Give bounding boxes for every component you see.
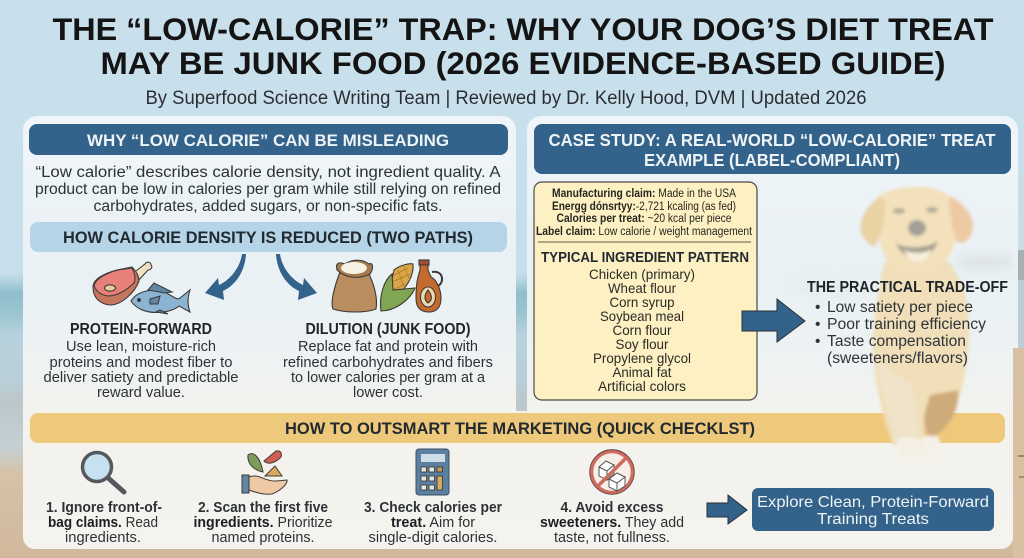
panel content: checklist	[46, 419, 994, 546]
text block: step 4	[540, 500, 684, 546]
text block: practical trade-off: •	[815, 333, 820, 350]
text block: step 4: taste, not fullness.	[554, 530, 670, 546]
text block: protein-forward: proteins and modest fiber to	[50, 355, 233, 371]
text block: practical trade-off: Low satiety per piece	[827, 299, 973, 316]
checklist heading bar	[30, 413, 1005, 443]
heading: how calorie density is reduced: HOW CALORIE DENSITY IS REDUCED (TWO PATHS)	[63, 228, 473, 247]
list: ingredients: Wheat flour	[608, 280, 676, 296]
icon: no sugar cubes	[590, 450, 634, 494]
text block: label claims	[536, 188, 753, 238]
text block: practical trade-off: Poor training efficiency	[827, 316, 986, 333]
heading: why low calorie can be misleading	[29, 124, 508, 155]
heading: why low calorie can be misleading: WHY “LOW CALORIE” CAN BE MISLEADING	[87, 131, 449, 150]
button: explore treats: Training Treats	[817, 511, 929, 528]
text block: protein-forward: PROTEIN-FORWARD	[70, 321, 212, 338]
text block: definition	[35, 164, 501, 215]
heading: case study: CASE STUDY: A REAL-WORLD “LOW-CALORIE” TREAT	[548, 130, 996, 150]
title	[52, 11, 994, 81]
text block: dilution: to lower calories per gram at a	[291, 370, 486, 386]
text block: dilution: DILUTION (JUNK FOOD)	[306, 321, 470, 338]
arrow: to dilution	[276, 254, 317, 300]
text block: practical trade-off: THE PRACTICAL TRADE-OFF	[807, 279, 1008, 296]
text block: step 3: treat. Aim for	[391, 515, 475, 531]
arrow: to protein-forward	[205, 254, 246, 300]
panel content: why low calorie	[29, 124, 508, 401]
text block: definition: “Low calorie” describes calorie density, not ingredient quality. A	[36, 164, 501, 181]
heading: case study	[534, 124, 1011, 174]
text block: dilution: lower cost.	[353, 385, 423, 401]
text block: label claims: Label claim: Low calorie / weight management	[536, 226, 753, 238]
arrow: to call to action	[707, 495, 747, 524]
button: explore treats: Explore Clean, Protein-Forward	[757, 494, 989, 511]
heading: typical ingredient pattern: TYPICAL INGREDIENT PATTERN	[541, 250, 749, 266]
list: ingredients: Corn flour	[612, 322, 672, 338]
text block: label claims: Manufacturing claim: Made in the USA	[552, 188, 736, 200]
icon: flour sack, corn and syrup	[332, 260, 442, 312]
text block: step 2: 2. Scan the first five	[198, 500, 328, 516]
text block: definition: product can be low in calories per gram while still relying on refined	[35, 181, 501, 198]
text block: protein-forward: deliver satiety and predictable	[44, 370, 238, 386]
list: ingredients: Soy flour	[616, 336, 669, 352]
panel content: case study	[534, 124, 1011, 400]
heading: how calorie density is reduced	[30, 222, 507, 252]
text block: practical trade-off: (sweeteners/flavors)	[827, 350, 968, 367]
panel background: case study	[527, 116, 1018, 413]
text block: practical trade-off: •	[815, 299, 820, 316]
text block: practical trade-off: Taste compensation	[827, 333, 966, 350]
text block: step 2: named proteins.	[212, 530, 314, 546]
text block: dilution	[283, 321, 493, 401]
heading: how to outsmart the marketing: HOW TO OUTSMART THE MARKETING (QUICK CHECKLST)	[285, 419, 755, 438]
text block: step 4: sweeteners. They add	[540, 515, 684, 531]
icon: magnifying glass	[82, 452, 124, 492]
text block: step 1: 1. Ignore front-of-	[46, 500, 162, 516]
heading: case study: EXAMPLE (LABEL-COMPLIANT)	[644, 150, 900, 170]
text block: step 1: ingredients.	[65, 530, 141, 546]
text block: label claims: Calories per treat: ~20 kcal per piece	[556, 213, 732, 225]
photo: golden retriever	[860, 187, 973, 463]
title: THE “LOW-CALORIE” TRAP: WHY YOUR DOG’S DIET TREAT	[52, 11, 994, 47]
text block: protein-forward: Use lean, moisture-rich	[66, 339, 216, 355]
text block: step 3: 3. Check calories per	[364, 500, 502, 516]
panel background: checklist	[23, 411, 1013, 549]
byline: By Superfood Science Writing Team | Reviewed by Dr. Kelly Hood, DVM | Updated 2026	[146, 88, 866, 109]
text block: step 3	[364, 500, 502, 546]
text block: step 1: bag claims. Read	[48, 515, 158, 531]
text block: step 3: single-digit calories.	[368, 530, 498, 546]
panel background: why low calorie	[23, 116, 516, 413]
list: ingredients: Chicken (primary)	[589, 266, 695, 282]
icon: meat and fish	[93, 262, 190, 314]
list: ingredients: Animal fat	[612, 364, 672, 380]
list: ingredients	[589, 266, 695, 394]
text block: practical trade-off: •	[815, 316, 820, 333]
text block: step 2: ingredients. Prioritize	[194, 515, 332, 531]
icon: calculator	[416, 449, 449, 495]
text block: label claims: Energg dónsrtyy:-2,721 kcaling (as fed)	[552, 201, 736, 213]
text block: definition: carbohydrates, added sugars, or non-specific fats.	[94, 198, 442, 215]
text block: practical trade-off	[807, 279, 1008, 367]
card: label and ingredient pattern	[534, 182, 757, 400]
title: MAY BE JUNK FOOD (2026 EVIDENCE-BASED GUIDE)	[100, 45, 946, 81]
list: ingredients: Propylene glycol	[593, 350, 691, 366]
arrow: to trade-off	[742, 299, 805, 342]
text block: step 4: 4. Avoid excess	[560, 500, 664, 516]
list: ingredients: Artificial colors	[598, 378, 686, 394]
text block: step 2	[194, 500, 332, 546]
list: ingredients: Soybean meal	[600, 308, 684, 324]
icon: hand holding ingredients	[242, 451, 287, 494]
list: ingredients: Corn syrup	[610, 294, 675, 310]
text block: dilution: Replace fat and protein with	[298, 339, 478, 355]
text block: dilution: refined carbohydrates and fibers	[283, 355, 493, 371]
text block: step 1	[46, 500, 162, 546]
text block: protein-forward: reward value.	[97, 385, 185, 401]
text block: protein-forward	[44, 321, 238, 401]
button: explore treats	[752, 488, 994, 531]
